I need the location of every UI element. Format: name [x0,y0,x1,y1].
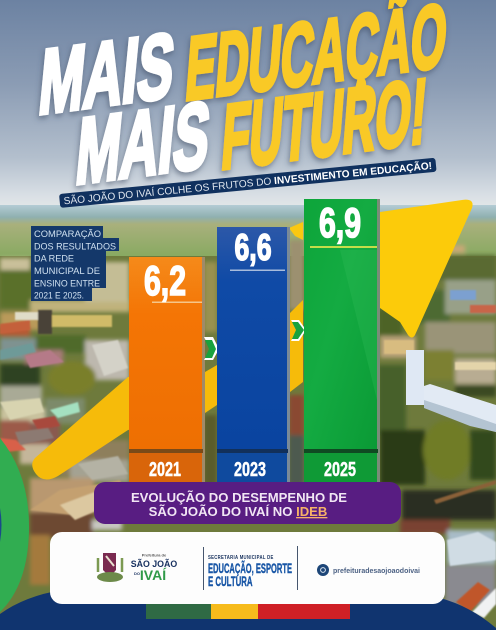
bottom navy band [0,590,496,630]
background: sky [0,0,496,210]
instagram handle [317,564,420,576]
value 6,2: 6,2 [144,257,186,304]
icon: municipal crest [97,553,123,582]
logo: prefeitura de São João do Ivaí: IVAÍ [140,567,167,583]
subtitle ribbon [59,158,437,208]
main title [35,0,450,205]
subtitle text: SÃO JOÃO DO IVAÍ COLHE OS FRUTOS DO INVESTIMENTO EM EDUCAÇÃO! [63,159,433,207]
logo: prefeitura de São João do Ivaí: SÃO JOÃO [131,559,177,569]
divider left [203,547,204,590]
callout: comparison note: DOS RESULTADOS [34,242,116,252]
department name: SECRETARIA MUNICIPAL DE [208,554,274,561]
callout: comparison note [31,226,119,301]
decorative colour stripes [146,604,350,619]
callout: comparison note: COMPARAÇÃO [34,229,101,239]
department name: EDUCAÇÃO, ESPORTE [208,561,292,577]
white footer card [50,532,445,604]
year 2023: 2023 [234,458,266,481]
church tower and nave [406,350,496,432]
purple banner [94,482,401,524]
year 2025: 2025 [324,458,356,481]
logo: prefeitura de São João do Ivaí: Prefeitura de [142,552,167,558]
logo: prefeitura de São João do Ivaí: DO [134,571,140,576]
callout: comparison note: ENSINO ENTRE [34,278,100,288]
title word: FUTURO!: FUTURO! [218,60,430,189]
title word: MAIS line 2: MAIS [72,83,214,205]
purple banner: SÃO JOÃO DO IVAÍ NO IDEB [149,504,327,519]
value 6,6: 6,6 [234,227,272,268]
bar: 2025 [304,199,380,483]
value 6,9: 6,9 [319,199,361,246]
logo: prefeitura de São João do Ivaí [97,552,177,583]
arrow chevron 2023 to 2025 [291,320,306,341]
callout: comparison note: MUNICIPAL DE [34,266,100,276]
department name: E CULTURA [208,575,253,590]
bar: 2021 [129,257,205,483]
department name [208,554,292,590]
arc inner blue [0,508,2,542]
callout: comparison note: DA REDE [34,254,74,264]
callout: comparison note: 2021 E 2025. [34,290,84,300]
yellow growth arrow [32,200,473,480]
green arc at left edge [0,438,29,612]
purple banner: EVOLUÇÃO DO DESEMPENHO DE [131,490,347,505]
arrow chevron 2021 to 2023 [204,337,219,360]
icon: instagram [317,564,329,576]
bar: 2023 [217,227,290,483]
title word: MAIS line 1: MAIS [35,15,179,135]
background: aerial city photo [0,205,496,630]
divider right [297,546,298,590]
instagram handle: prefeituradesaojoaodoivai [333,566,420,575]
year 2021: 2021 [149,458,181,481]
